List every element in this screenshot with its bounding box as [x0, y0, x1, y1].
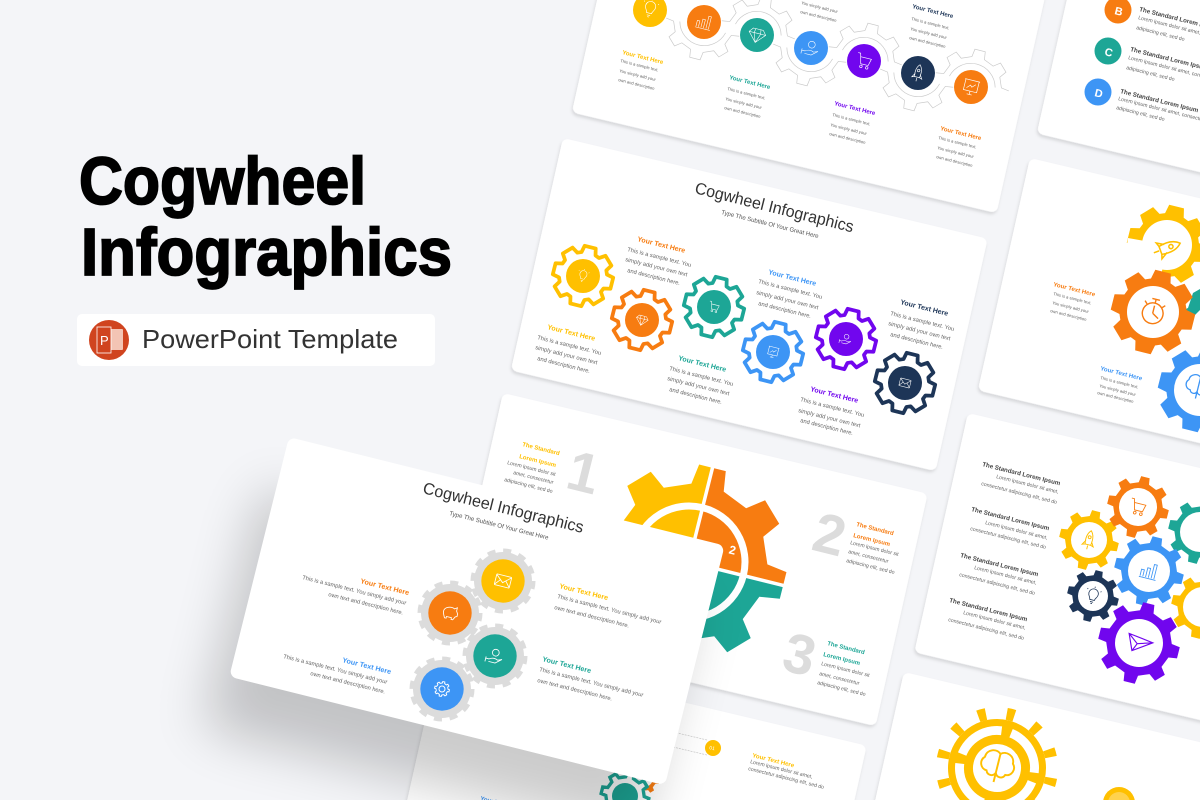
number 3 block: Lorem ipsum dolor sit — [821, 661, 871, 679]
text blocks: Your Text Here — [940, 126, 982, 142]
orange gear with stopwatch — [1103, 262, 1200, 362]
text blocks: This is a sample text. You — [537, 335, 602, 357]
text blocks: Your Text Here — [912, 4, 954, 20]
chart: split cogwheel: 4 — [698, 593, 709, 608]
text list: Lorem ipsum dolor sit amet, — [996, 474, 1059, 495]
text block yellow: Your Text Here — [559, 583, 609, 602]
brain cogwheel — [930, 701, 1064, 800]
number 2 block: adipiscing elit, sed do — [846, 558, 895, 576]
yellow gear with rocket — [1119, 197, 1200, 300]
text blocks: and description here. — [537, 356, 591, 375]
text block yellow: own text and description here. — [554, 605, 630, 630]
text blocks: This is a sample text. — [1053, 291, 1092, 305]
text list: consectetur adipiscing elit, sed do — [970, 526, 1047, 551]
text blocks: Your Text Here — [834, 101, 876, 117]
panel: front slide with four gray gears — [229, 437, 725, 785]
text blocks: You simply add your — [1052, 300, 1090, 314]
timeline text: Lorem ipsum dolor sit amet, — [750, 759, 813, 780]
text list: consectetur adipiscing elit, sed do — [981, 481, 1058, 506]
front slide shadow — [203, 490, 698, 800]
timeline marker 01 — [705, 740, 721, 756]
text blocks: and description here. — [758, 301, 812, 320]
timeline gears — [596, 759, 663, 800]
list item B — [1104, 0, 1200, 43]
chart: split cogwheel — [624, 464, 786, 652]
timeline text: Your Text Here — [752, 753, 795, 770]
text block teal: Your Text Here — [542, 656, 592, 675]
teal gear fragment — [1176, 289, 1200, 320]
panel: slide with numbered split gear — [451, 393, 928, 726]
number 2 block: The Standard — [856, 522, 894, 537]
text blocks: own and description — [1050, 308, 1088, 322]
text blocks: own and description — [829, 131, 867, 145]
text blocks: You simply add your — [937, 145, 975, 159]
text blocks: own and description — [909, 35, 947, 49]
text blocks: Your Text Here — [900, 299, 949, 318]
outlined gears — [547, 240, 941, 419]
panel: slide with outlined cogwheels — [511, 138, 988, 471]
PowerPoint Template badge — [77, 314, 435, 366]
text list: consectetur adipiscing elit, sed do — [948, 617, 1025, 642]
text blocks: simply add your own text — [756, 290, 819, 311]
text blocks: simply add your own text — [535, 345, 598, 366]
title: Infographics — [81, 215, 452, 290]
number 3 block: adipiscing elit, sed do — [817, 680, 866, 698]
number 3 block: 3 — [777, 620, 822, 688]
text block orange: own text and description here. — [328, 592, 404, 617]
number 1 block: 1 — [561, 438, 606, 506]
text blocks: This is a sample text. You — [627, 247, 692, 269]
text blocks: This is a sample text. — [938, 135, 977, 149]
icon: PowerPoint logo: P — [100, 333, 109, 348]
number 2 block: amet, consectetur — [848, 549, 889, 565]
text block teal — [537, 656, 644, 703]
gear cluster — [1053, 470, 1200, 692]
text blocks: and description here. — [627, 268, 681, 287]
timeline text: consectetur adipiscing elit, sed do — [748, 766, 825, 791]
number 1 block — [504, 438, 606, 506]
number 1 block: amet, consectetur — [513, 470, 554, 486]
gear yellow mail — [473, 551, 533, 611]
slide heading: Type The Subtitle Of Your Great Here — [449, 510, 550, 542]
panel: slide with connected gear chain — [572, 0, 1049, 213]
text block blue: This is a sample text. You simply add your — [283, 654, 388, 686]
timeline text — [748, 753, 825, 791]
percent badge — [1103, 787, 1135, 800]
text block blue: Your Text Here — [342, 657, 392, 676]
text block yellow — [554, 583, 662, 630]
list item C: C — [1103, 46, 1114, 60]
text blocks: simply add your own text — [667, 376, 730, 397]
text blocks: own and description — [936, 154, 974, 168]
gear orange piggy bank — [420, 583, 480, 643]
text blocks — [618, 0, 982, 168]
list item C — [1094, 38, 1200, 83]
text blocks: Your Text Here — [622, 50, 664, 66]
list item B: adipiscing elit, sed do — [1136, 25, 1185, 43]
timeline marker 01: 01 — [709, 745, 716, 752]
text block orange: This is a sample text. You simply add your — [302, 575, 407, 607]
text blocks: This is a sample text. You — [669, 366, 734, 388]
list item D: D — [1093, 87, 1104, 101]
text blocks: You simply add your — [910, 26, 948, 40]
text blocks: simply add your own text — [888, 321, 951, 342]
text blocks: Your Text Here — [547, 324, 596, 343]
text blocks: own and description — [618, 77, 656, 91]
number 1 block: Lorem ipsum dolor sit — [507, 460, 557, 478]
gear blue cog — [412, 659, 472, 719]
text blocks: Your Text Here — [729, 75, 771, 91]
list item D — [1084, 78, 1200, 124]
list item D: adipiscing elit, sed do — [1116, 105, 1165, 123]
text blocks: simply add your own text — [798, 408, 861, 429]
panel: slide with alphabet list — [1037, 0, 1200, 234]
number 2 block: Lorem Ipsum — [853, 533, 891, 548]
text blocks: You simply add your — [619, 68, 657, 82]
panel: slide with brain gear — [852, 672, 1200, 800]
blue gear with brain — [1150, 340, 1200, 440]
slide heading: Type The Subtitle Of Your Great Here — [721, 209, 820, 240]
list item D: The Standard Lorem Ipsum — [1120, 88, 1199, 114]
text list: consectetur adipiscing elit, sed do — [959, 572, 1036, 597]
text blocks: own and description — [724, 105, 762, 119]
text blocks: own and description — [800, 9, 838, 23]
timeline connector lines — [673, 732, 707, 755]
text blocks: You simply add your — [830, 122, 868, 136]
text list: The Standard Lorem Ipsum — [960, 552, 1039, 578]
text blocks: Your Text Here — [678, 355, 727, 374]
text blocks: This is a sample text. You — [800, 397, 865, 419]
number 1 block: adipiscing elit, sed do — [504, 477, 553, 495]
text blocks — [535, 236, 955, 437]
text blocks: This is a sample text. — [1100, 375, 1139, 389]
panel: slide with gear cluster — [914, 413, 1200, 753]
text blocks: and description here. — [800, 418, 854, 437]
text block yellow: This is a sample text. You simply add your — [557, 594, 662, 626]
text blocks: Your Text Here — [768, 269, 817, 288]
text blocks: You simply add your — [801, 0, 839, 14]
panel: slide with rocket and stopwatch gears — [978, 158, 1200, 491]
text list: Lorem ipsum dolor sit amet, — [985, 520, 1048, 541]
number 1 block: The Standard — [522, 442, 560, 457]
slide heading: Cogwheel Infographics — [421, 479, 585, 537]
text blocks — [1050, 282, 1143, 404]
gear teal hand — [465, 626, 525, 686]
text blocks: This is a sample text. — [832, 112, 871, 126]
text list — [948, 461, 1061, 642]
number 2 block: 2 — [807, 500, 852, 568]
title: Cogwheel — [79, 144, 366, 219]
text blocks: This is a sample text. — [911, 16, 950, 30]
text blocks: own and description — [1097, 390, 1135, 404]
number 3 block: Lorem Ipsum — [823, 652, 861, 667]
text blocks: and description here. — [669, 387, 723, 406]
PowerPoint Template badge: PowerPoint Template — [142, 324, 398, 354]
text blocks: This is a sample text. — [727, 86, 766, 100]
text list: The Standard Lorem Ipsum — [949, 597, 1028, 623]
text list: Lorem ipsum dolor sit amet, — [963, 610, 1026, 631]
text blocks: This is a sample text. You — [758, 279, 823, 301]
slide heading: Cogwheel Infographics — [693, 179, 856, 236]
number 3 block: amet, consectetur — [819, 671, 860, 687]
panel: slide with timeline — [390, 645, 867, 800]
list item C: adipiscing elit, sed do — [1126, 65, 1175, 83]
number 3 block — [777, 620, 871, 698]
number 2 block: Lorem ipsum dolor sit — [850, 540, 900, 558]
text blocks: simply add your own text — [625, 257, 688, 278]
text blocks: Your Text Here — [810, 386, 859, 405]
text blocks: and description here. — [890, 332, 944, 351]
text block orange: Your Text Here — [360, 578, 410, 597]
number 1 block: Lorem Ipsum — [519, 454, 557, 469]
text list: Lorem ipsum dolor sit amet, — [974, 565, 1037, 586]
text block blue: own text and description here. — [310, 671, 386, 696]
text list: The Standard Lorem Ipsum — [982, 461, 1061, 487]
number 3 block: The Standard — [827, 641, 865, 656]
text list: The Standard Lorem Ipsum — [971, 506, 1050, 532]
text block teal: own text and description here. — [537, 678, 613, 703]
text blocks: You simply add your — [1099, 383, 1137, 397]
text block teal: This is a sample text. You simply add your — [539, 667, 644, 699]
text blocks: You simply add your — [725, 96, 763, 110]
list item B: B — [1113, 5, 1124, 19]
text blocks: Your Text Here — [1100, 366, 1143, 383]
text blocks: This is a sample text. — [620, 58, 659, 72]
text blocks: Your Text Here — [1053, 282, 1096, 299]
icon: PowerPoint logo — [89, 320, 129, 360]
text blocks: This is a sample text. You — [890, 311, 955, 333]
chart: split cogwheel: 2 — [728, 543, 738, 558]
title — [79, 144, 452, 290]
gear chain — [633, 0, 1017, 119]
text blocks: Your Text Here — [637, 236, 686, 255]
number 2 block — [807, 500, 900, 576]
